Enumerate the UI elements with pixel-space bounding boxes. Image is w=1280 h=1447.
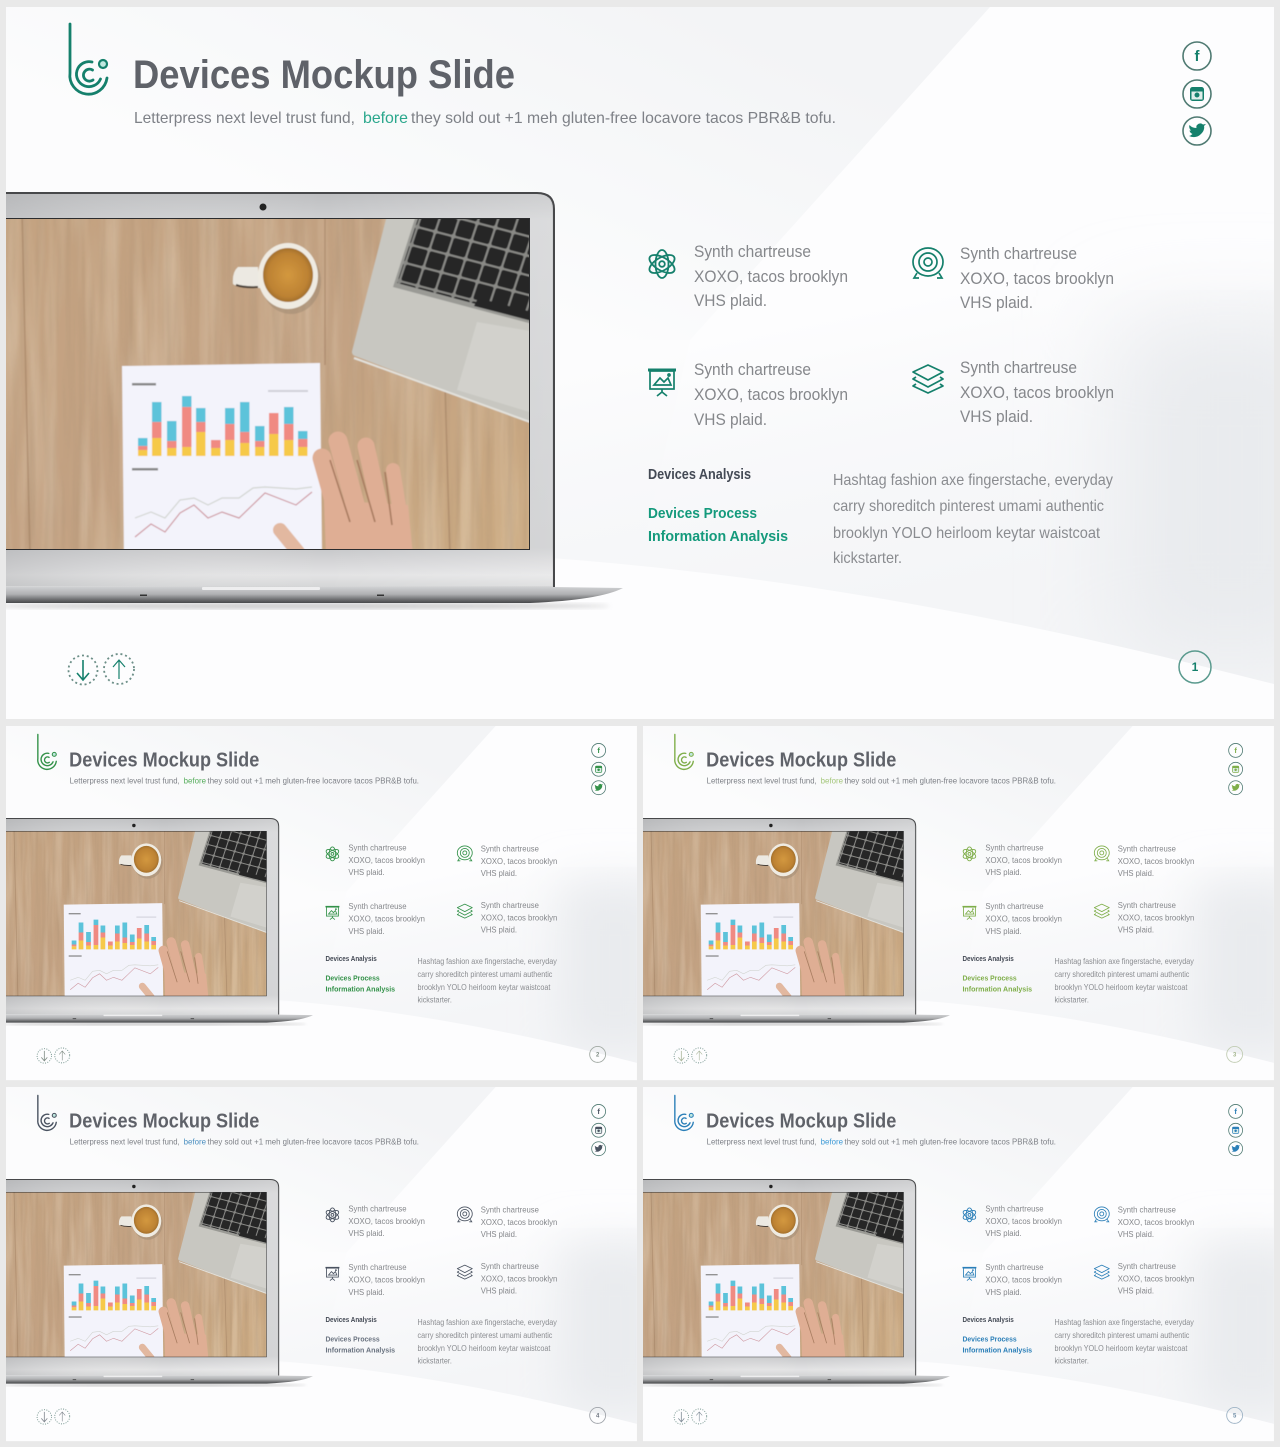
analysis headings: [648, 466, 788, 545]
feature grid: XOXO, tacos brooklyn: [481, 856, 558, 866]
feature grid: Synth chartreuse: [985, 901, 1044, 911]
icons: social links: f: [597, 746, 600, 755]
analysis headings: Devices Analysis: [962, 954, 1014, 963]
feature grid: XOXO, tacos brooklyn: [348, 855, 425, 865]
paragraph: Hashtag fashion axe fingerstache, everyday: [833, 472, 1113, 489]
feature grid: XOXO, tacos brooklyn: [1118, 1217, 1195, 1227]
title: Devices Mockup Slide: [706, 749, 896, 771]
feature grid: XOXO, tacos brooklyn: [985, 1216, 1062, 1226]
icons: social links: f: [1194, 48, 1200, 65]
feature grid: VHS plaid.: [348, 1228, 385, 1238]
feature text 3: VHS plaid.: [694, 410, 767, 429]
feature grid: [962, 842, 1195, 936]
feature text 1: XOXO, tacos brooklyn: [694, 267, 848, 286]
paragraph: brooklyn YOLO heirloom keytar waistcoat: [833, 525, 1100, 542]
laptop mockup with desk photo: [0, 193, 623, 609]
panel: main slide: [0, 7, 1280, 719]
feature grid: XOXO, tacos brooklyn: [1118, 913, 1195, 923]
feature grid: XOXO, tacos brooklyn: [985, 914, 1062, 924]
page number: 3: [1233, 1052, 1237, 1058]
icon: logo: [38, 1095, 56, 1130]
feature grid: Synth chartreuse: [481, 1261, 539, 1271]
feature text 2: Synth chartreuse: [960, 244, 1077, 263]
paragraph: kickstarter.: [418, 1357, 452, 1366]
analysis headings: Devices Process: [648, 505, 757, 522]
analysis headings: Information Analysis: [648, 528, 788, 545]
slide background: [6, 7, 1280, 719]
paragraph: brooklyn YOLO heirloom keytar waistcoat: [418, 1344, 551, 1353]
feature grid: VHS plaid.: [481, 1286, 517, 1296]
paragraph: carry shoreditch pinterest umami authentic: [1055, 970, 1189, 979]
panel: slide 5 blue: [630, 1087, 1280, 1441]
feature grid: VHS plaid.: [985, 926, 1022, 936]
feature grid: [325, 842, 558, 936]
icon: logo: [70, 24, 107, 94]
feature grid: VHS plaid.: [1118, 868, 1154, 878]
page number: 5: [1233, 1413, 1237, 1419]
paragraph: [1055, 1318, 1194, 1366]
feature grid: VHS plaid.: [1118, 1286, 1154, 1296]
feature text 3: Synth chartreuse: [694, 360, 811, 379]
feature grid: Synth chartreuse: [481, 1204, 539, 1214]
feature grid: VHS plaid.: [985, 1228, 1022, 1238]
feature grid: Synth chartreuse: [1118, 1204, 1176, 1214]
feature text 4: VHS plaid.: [960, 407, 1033, 426]
subtitle: Letterpress next level trust fund,: [70, 777, 180, 786]
feature grid: XOXO, tacos brooklyn: [1118, 856, 1195, 866]
subtitle: they sold out +1 meh gluten-free locavore tacos PBR&B tofu.: [411, 110, 836, 127]
subtitle: before: [821, 1138, 844, 1147]
feature grid: Synth chartreuse: [1118, 1261, 1176, 1271]
icons: social links: f: [1234, 746, 1237, 755]
subtitle: [135, 112, 835, 126]
page number: [1227, 1046, 1243, 1062]
analysis headings: Devices Analysis: [325, 1315, 377, 1324]
paragraph: carry shoreditch pinterest umami authentic: [833, 498, 1104, 515]
feature grid: Synth chartreuse: [481, 900, 539, 910]
icon: navigation arrows: [37, 1409, 70, 1424]
page number: 2: [596, 1052, 600, 1058]
analysis headings: [962, 954, 1032, 994]
feature grid: [325, 1203, 558, 1297]
laptop mockup: [0, 1180, 313, 1387]
page number: [1179, 651, 1211, 683]
paragraph: [418, 957, 557, 1005]
subtitle: they sold out +1 meh gluten-free locavore tacos PBR&B tofu.: [208, 1138, 419, 1147]
paragraph: kickstarter.: [1055, 1357, 1089, 1366]
subtitle: before: [363, 110, 408, 127]
page number: [590, 1407, 606, 1423]
subtitle: Letterpress next level trust fund,: [70, 1138, 180, 1147]
icon: logo: [38, 734, 56, 769]
feature grid: VHS plaid.: [985, 1287, 1022, 1297]
feature grid: VHS plaid.: [1118, 925, 1154, 935]
analysis headings: Information Analysis: [962, 1346, 1032, 1355]
paragraph: Hashtag fashion axe fingerstache, everyday: [1055, 1318, 1194, 1327]
feature grid: Synth chartreuse: [1118, 843, 1176, 853]
feature grid: XOXO, tacos brooklyn: [481, 1274, 558, 1284]
feature grid: XOXO, tacos brooklyn: [348, 1216, 425, 1226]
icons: social links: [1183, 42, 1211, 145]
analysis headings: [325, 954, 395, 994]
feature grid: VHS plaid.: [481, 1229, 517, 1239]
page number: [1227, 1407, 1243, 1423]
feature text 1: [694, 242, 848, 310]
feature text 3: [694, 360, 848, 429]
subtitle: Letterpress next level trust fund,: [134, 110, 355, 127]
page number: [590, 1046, 606, 1062]
paragraph: Hashtag fashion axe fingerstache, everyday: [1055, 957, 1194, 966]
subtitle: they sold out +1 meh gluten-free locavore tacos PBR&B tofu.: [845, 777, 1056, 786]
feature grid: VHS plaid.: [985, 867, 1022, 877]
paragraph: kickstarter.: [833, 550, 902, 567]
feature text 4: Synth chartreuse: [960, 358, 1077, 377]
feature text 3: XOXO, tacos brooklyn: [694, 385, 848, 404]
icons: social links: [592, 743, 606, 795]
subtitle: they sold out +1 meh gluten-free locavore tacos PBR&B tofu.: [208, 777, 419, 786]
icon: logo: [675, 1095, 693, 1130]
paragraph: brooklyn YOLO heirloom keytar waistcoat: [418, 983, 551, 992]
paragraph: Hashtag fashion axe fingerstache, everyday: [418, 957, 557, 966]
icons: social links: f: [1234, 1107, 1237, 1116]
analysis headings: Information Analysis: [325, 1346, 395, 1355]
feature grid: Synth chartreuse: [985, 1203, 1044, 1213]
subtitle: before: [821, 777, 844, 786]
paragraph: Hashtag fashion axe fingerstache, everyday: [418, 1318, 557, 1327]
subtitle: [70, 778, 418, 785]
feature grid: XOXO, tacos brooklyn: [985, 1275, 1062, 1285]
feature text 1: VHS plaid.: [694, 291, 767, 310]
analysis headings: [962, 1315, 1032, 1355]
feature grid: Synth chartreuse: [985, 842, 1044, 852]
feature text 4: XOXO, tacos brooklyn: [960, 383, 1114, 402]
icon: atom: [647, 250, 677, 278]
icon: navigation arrows: [68, 654, 134, 684]
feature grid: Synth chartreuse: [348, 842, 407, 852]
feature grid: Synth chartreuse: [481, 843, 539, 853]
feature grid: XOXO, tacos brooklyn: [348, 1275, 425, 1285]
title: Devices Mockup Slide: [706, 1110, 896, 1132]
icon: navigation arrows: [37, 1048, 70, 1063]
paragraph: [418, 1318, 557, 1366]
subtitle: before: [184, 777, 207, 786]
subtitle: Letterpress next level trust fund,: [707, 1138, 817, 1147]
paragraph: [1055, 957, 1194, 1005]
feature grid: Synth chartreuse: [348, 901, 407, 911]
paragraph: kickstarter.: [418, 996, 452, 1005]
subtitle: [707, 778, 1056, 785]
feature text 1: Synth chartreuse: [694, 242, 811, 261]
analysis headings: Information Analysis: [325, 985, 395, 994]
feature grid: VHS plaid.: [348, 867, 385, 877]
feature text 2: [960, 244, 1114, 312]
panel: slide 2 green: [0, 726, 670, 1080]
paragraph: carry shoreditch pinterest umami authentic: [418, 970, 552, 979]
subtitle: before: [184, 1138, 207, 1147]
analysis headings: Devices Process: [325, 973, 380, 982]
analysis headings: Devices Analysis: [962, 1315, 1014, 1324]
icons: social links: [1229, 1104, 1243, 1156]
page number: 4: [596, 1413, 600, 1419]
paragraph: carry shoreditch pinterest umami authentic: [1055, 1331, 1189, 1340]
title: Devices Mockup Slide: [69, 1110, 259, 1132]
feature text 4: [960, 358, 1114, 426]
feature grid: Synth chartreuse: [348, 1262, 407, 1272]
analysis headings: Information Analysis: [962, 985, 1032, 994]
paragraph: [833, 472, 1113, 567]
laptop mockup: [0, 819, 313, 1026]
subtitle: they sold out +1 meh gluten-free locavore tacos PBR&B tofu.: [845, 1138, 1056, 1147]
panel: slide 4 charcoal: [0, 1087, 670, 1441]
laptop mockup: [630, 819, 950, 1026]
icons: social links: [1229, 743, 1243, 795]
analysis headings: Devices Process: [962, 973, 1017, 982]
icon: target: [913, 248, 943, 278]
page number: 1: [1192, 660, 1199, 674]
paragraph: kickstarter.: [1055, 996, 1089, 1005]
subtitle: [70, 1138, 419, 1147]
analysis headings: Devices Analysis: [325, 954, 377, 963]
icon: navigation arrows: [674, 1409, 707, 1424]
icon: navigation arrows: [674, 1048, 707, 1063]
feature grid: XOXO, tacos brooklyn: [348, 914, 425, 924]
feature grid: [962, 1203, 1195, 1297]
subtitle: [707, 1138, 1056, 1147]
feature text 2: XOXO, tacos brooklyn: [960, 269, 1114, 288]
subtitle: Letterpress next level trust fund,: [707, 777, 817, 786]
analysis headings: Devices Process: [962, 1334, 1017, 1343]
analysis headings: Devices Analysis: [648, 466, 751, 483]
analysis headings: [325, 1315, 395, 1355]
paragraph: brooklyn YOLO heirloom keytar waistcoat: [1055, 983, 1188, 992]
paragraph: carry shoreditch pinterest umami authentic: [418, 1331, 552, 1340]
feature grid: Synth chartreuse: [985, 1262, 1044, 1272]
title: Devices Mockup Slide: [133, 53, 515, 97]
icons: social links: f: [597, 1107, 600, 1116]
feature grid: XOXO, tacos brooklyn: [985, 855, 1062, 865]
feature grid: VHS plaid.: [1118, 1229, 1154, 1239]
icon: logo: [675, 734, 693, 769]
feature grid: XOXO, tacos brooklyn: [481, 913, 558, 923]
feature grid: Synth chartreuse: [1118, 900, 1176, 910]
analysis headings: Devices Process: [325, 1334, 380, 1343]
feature grid: XOXO, tacos brooklyn: [481, 1217, 558, 1227]
icons: social links: [592, 1104, 606, 1156]
feature grid: VHS plaid.: [481, 925, 517, 935]
icon: presentation board: [648, 370, 676, 396]
panel: slide 3 light green: [630, 726, 1280, 1080]
feature grid: VHS plaid.: [348, 1287, 385, 1297]
paragraph: brooklyn YOLO heirloom keytar waistcoat: [1055, 1344, 1188, 1353]
icon: layers: [913, 365, 943, 393]
title: Devices Mockup Slide: [69, 749, 259, 771]
feature grid: VHS plaid.: [481, 868, 517, 878]
feature grid: Synth chartreuse: [348, 1203, 407, 1213]
feature grid: VHS plaid.: [348, 926, 385, 936]
laptop mockup: [630, 1180, 950, 1387]
feature grid: XOXO, tacos brooklyn: [1118, 1274, 1195, 1284]
feature text 2: VHS plaid.: [960, 293, 1033, 312]
